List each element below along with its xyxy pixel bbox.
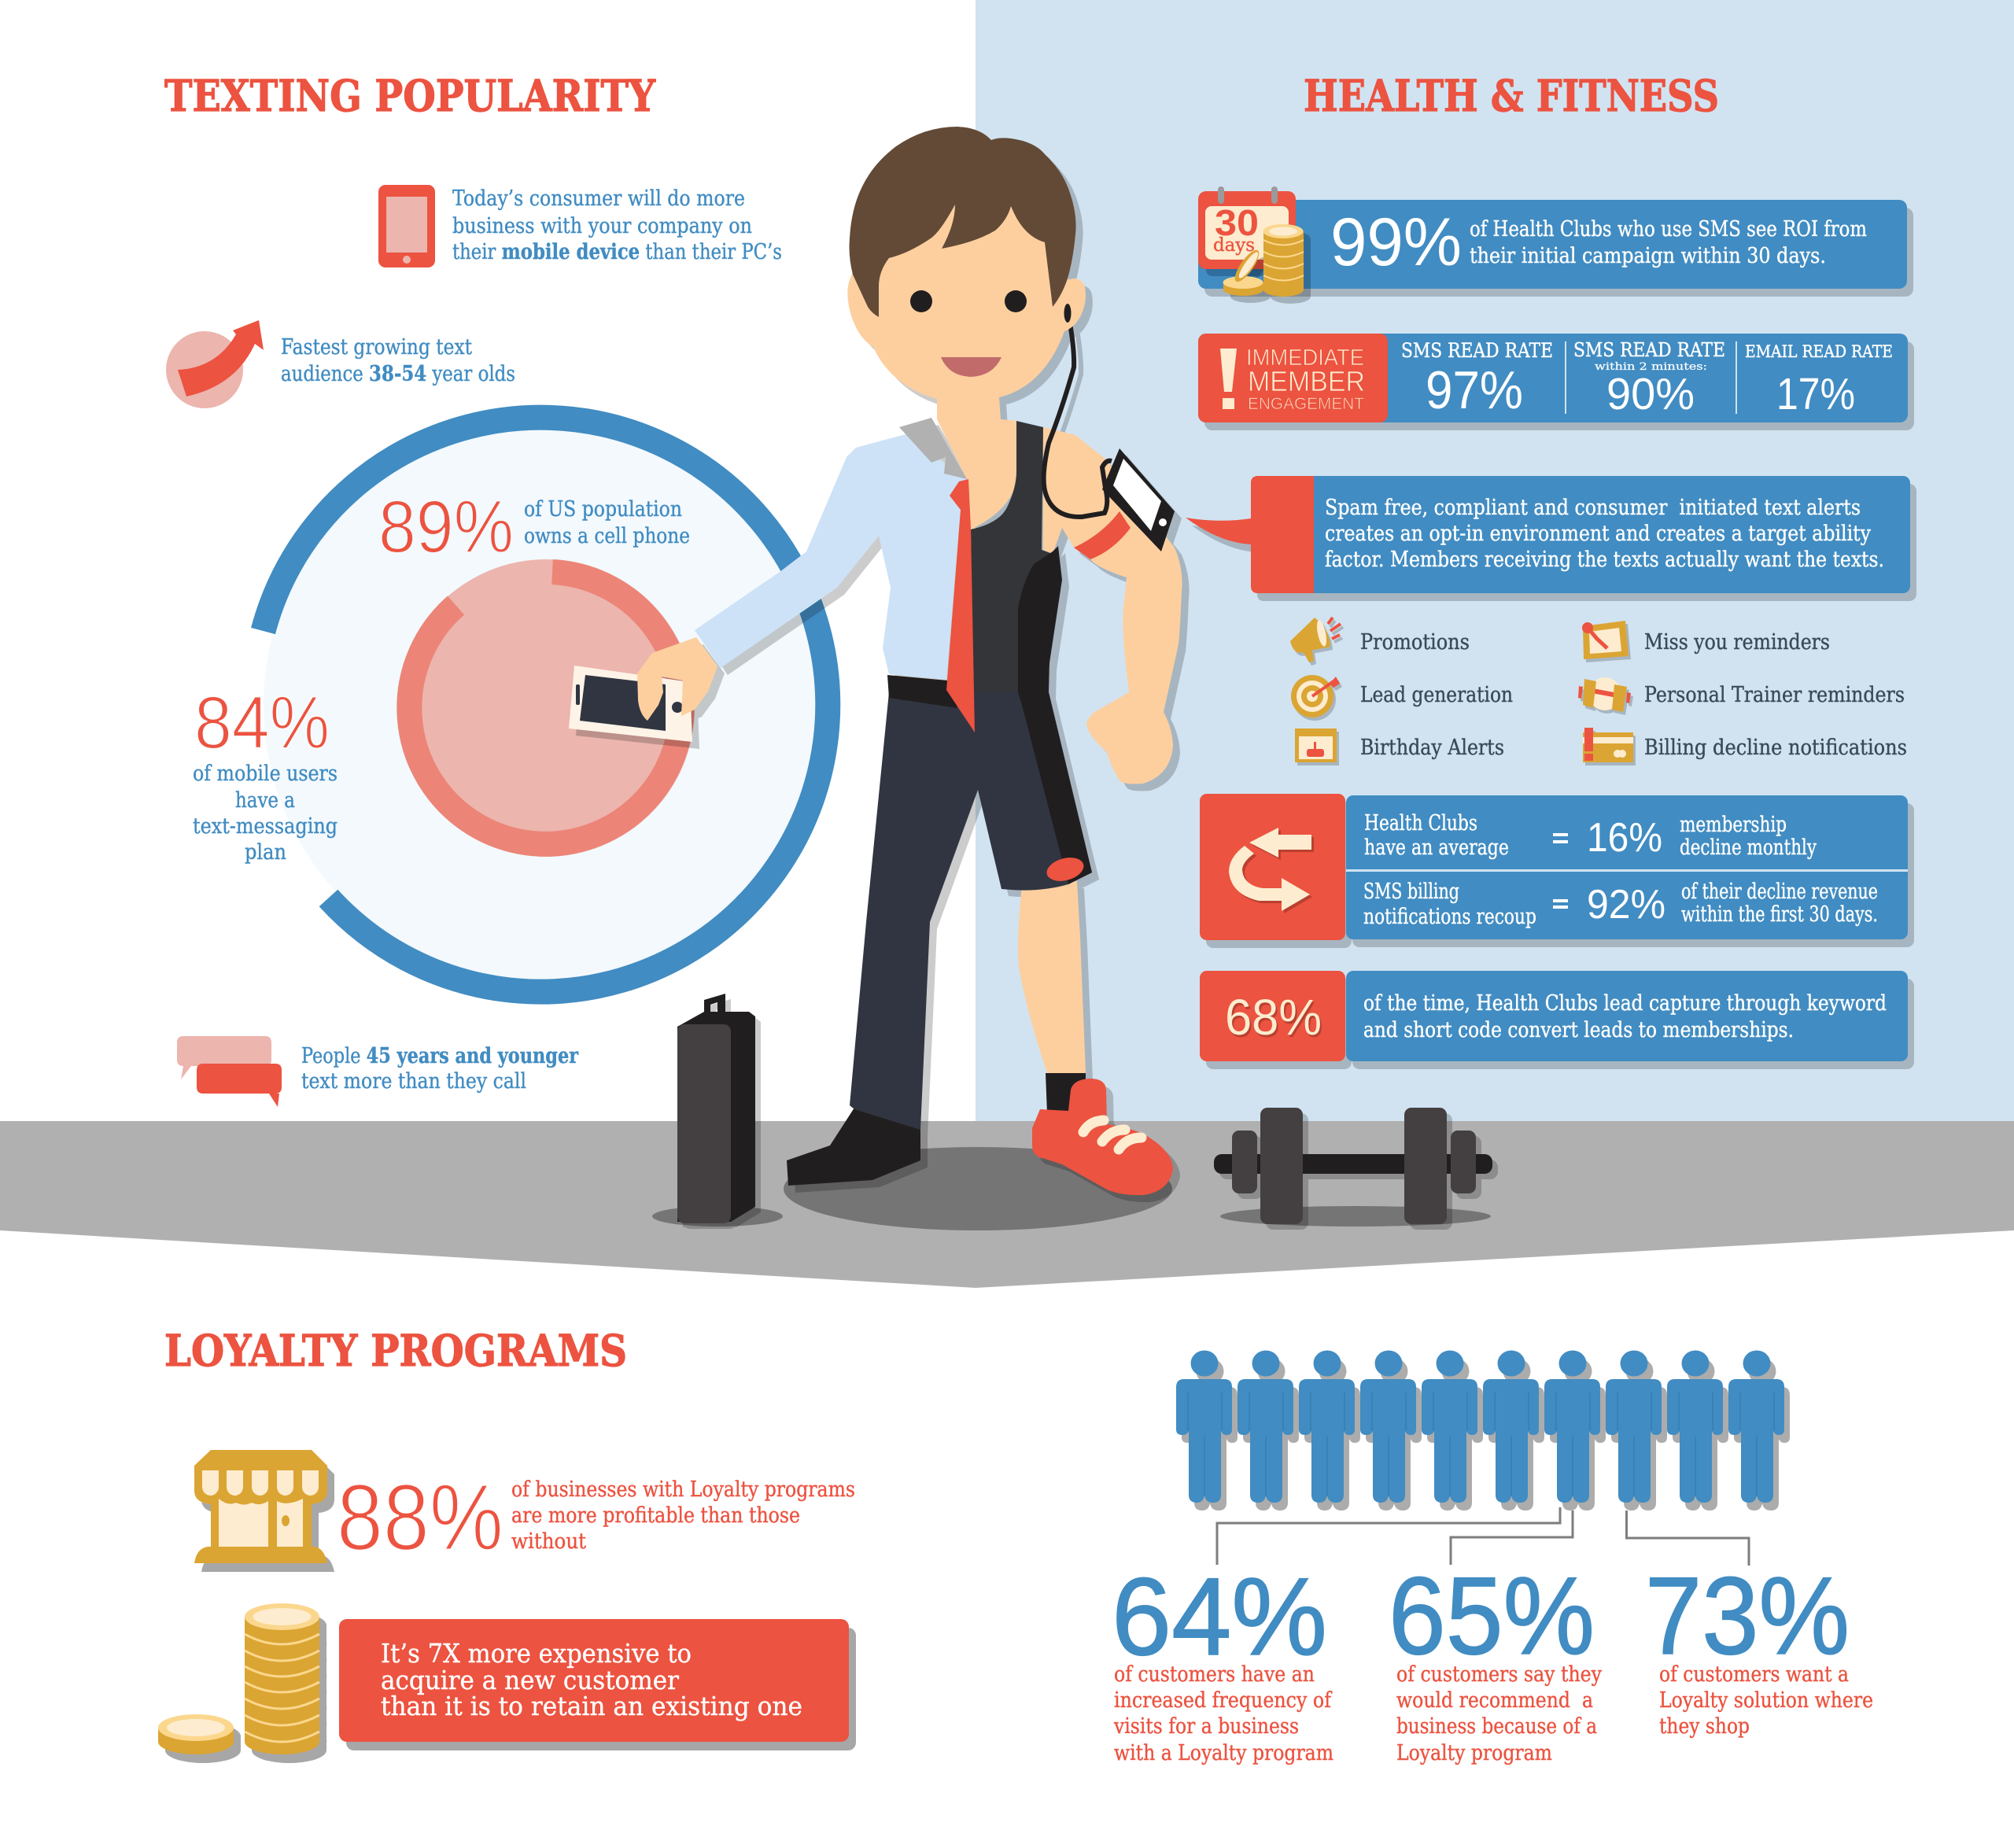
row: 92 percent: 92% xyxy=(1587,882,1665,928)
text: mobile device: Today’s consumer will do more xyxy=(452,186,745,211)
text: lead capture: and short code convert leads to memberships. xyxy=(1363,1018,1794,1042)
blue panel xyxy=(1346,795,1908,939)
row: 16 percent: membership xyxy=(1680,813,1787,837)
left hand xyxy=(637,637,717,721)
head xyxy=(847,127,1086,419)
label block: IMMEDIATE xyxy=(1246,345,1364,371)
text: mobile users: plan xyxy=(245,840,286,865)
trousers xyxy=(850,692,1092,1130)
icon: megaphone xyxy=(1290,618,1341,662)
text: loyalty profitable xyxy=(511,1477,855,1554)
text: loyalty profitable: of businesses with Loyalty programs xyxy=(511,1477,855,1502)
text: loyalty profitable: without xyxy=(511,1529,586,1554)
text: ROI: of Health Clubs who use SMS see ROI from xyxy=(1470,217,1867,242)
stat: 64 percent: increased frequency of xyxy=(1114,1688,1333,1713)
chart: 84 percent ring xyxy=(263,418,828,992)
blue box xyxy=(1346,971,1908,1061)
panel: spam free callout xyxy=(1186,476,1910,593)
text: fastest growing: Fastest growing text xyxy=(281,335,472,360)
text: ROI xyxy=(1470,217,1867,268)
icon: target xyxy=(1291,675,1340,717)
text: birthday alerts: Birthday Alerts xyxy=(1360,736,1504,760)
stat: SMS read rate within 2 minutes: SMS READ RATE xyxy=(1573,339,1725,361)
text: lead generation: Lead generation xyxy=(1360,683,1513,707)
panel background xyxy=(339,1619,849,1742)
panel: 68 percent xyxy=(1200,971,1908,1061)
floor shadows xyxy=(652,1147,1491,1230)
stat: SMS read rate: 97% xyxy=(1426,360,1523,420)
shirt with left sleeve xyxy=(695,434,967,680)
sock xyxy=(1046,1073,1086,1113)
icon list xyxy=(1290,618,1907,762)
chart: inner pie xyxy=(397,559,695,857)
panel background xyxy=(1198,334,1908,422)
icon: calendar with coins: days xyxy=(1213,235,1255,256)
text: miss you reminders: Miss you reminders xyxy=(1644,630,1830,655)
stat: email read rate: EMAIL READ RATE xyxy=(1745,342,1893,361)
stat: email read rate xyxy=(1745,342,1893,419)
stat: 65 percent xyxy=(1389,1554,1603,1765)
icon: tablet xyxy=(378,185,435,267)
text: lead capture: of the time, Health Clubs lead capture through keyword xyxy=(1363,991,1887,1016)
number: 84%: 84% xyxy=(194,681,330,765)
text: loyalty profitable: are more profitable than those xyxy=(511,1503,800,1528)
text: spam free xyxy=(1325,496,1884,572)
red box xyxy=(1200,971,1345,1061)
stat: 65 percent: Loyalty program xyxy=(1396,1741,1552,1765)
row: 16 percent: decline monthly xyxy=(1680,835,1817,860)
stat: SMS read rate within 2 minutes: 90% xyxy=(1606,369,1695,419)
stat: 65 percent: 65% xyxy=(1389,1554,1595,1677)
icon: calendar with coins xyxy=(1198,186,1304,297)
text: mobile users: text-messaging xyxy=(193,814,338,839)
number: 68%: 68% xyxy=(1225,989,1322,1046)
shoe: black xyxy=(787,1108,920,1186)
text: mobile device xyxy=(452,186,782,264)
tablet stat xyxy=(378,185,782,267)
briefcase xyxy=(677,994,755,1223)
stat: 64 percent: visits for a business xyxy=(1113,1714,1299,1739)
connector lines xyxy=(1217,1507,1749,1566)
speech stat xyxy=(177,1036,579,1107)
row: 16 percent xyxy=(1364,811,1817,861)
panel: 99 percent ROI xyxy=(1198,186,1907,297)
leg xyxy=(1018,881,1086,1073)
chart: outer circle fill xyxy=(264,427,819,983)
stat: SMS read rate within 2 minutes xyxy=(1573,339,1725,419)
text: promotions: Promotions xyxy=(1360,630,1470,655)
stat: 65 percent: business because of a xyxy=(1396,1714,1597,1739)
icon: coins xyxy=(158,1603,319,1754)
chart: 89 percent ring xyxy=(409,572,681,844)
floor xyxy=(0,1121,2014,1288)
text: 7X: acquire a new customer xyxy=(381,1665,679,1695)
panel: 7X more expensive xyxy=(339,1619,849,1742)
text: billing decline: Billing decline notifications xyxy=(1644,736,1907,760)
icon: dumbbell xyxy=(1578,677,1631,712)
text: 7X: It’s 7X more expensive to xyxy=(381,1638,692,1669)
text: people 45 years xyxy=(301,1044,579,1094)
text: ROI: their initial campaign within 30 days. xyxy=(1470,244,1826,268)
stat: email read rate: 17% xyxy=(1776,369,1855,419)
text: US population: of US population xyxy=(524,497,682,522)
text: US population: owns a cell phone xyxy=(524,524,690,548)
icon: pinned note xyxy=(1582,621,1629,659)
people row xyxy=(1176,1350,1784,1503)
text: US population xyxy=(524,497,690,548)
text: lead capture xyxy=(1363,991,1887,1042)
stat: 73 percent: of customers want a xyxy=(1659,1662,1849,1687)
text: mobile users: of mobile users xyxy=(193,762,338,786)
stat: 64 percent xyxy=(1112,1555,1333,1765)
text: mobile users: have a xyxy=(235,788,295,813)
icon: return arrows xyxy=(1229,828,1311,911)
row: 92 percent: notifications recoup xyxy=(1363,905,1536,929)
text: fastest growing xyxy=(281,335,515,386)
dumbbell xyxy=(1214,1108,1492,1224)
row: 92 percent: within the first 30 days. xyxy=(1681,902,1878,927)
text: spam free: Spam free, compliant and consumer initiated text alerts xyxy=(1325,496,1861,520)
row: 92 percent: of their decline revenue xyxy=(1681,880,1878,904)
stat: 73 percent: 73% xyxy=(1645,1554,1850,1677)
earphone wire xyxy=(1044,311,1112,517)
text: mobile users xyxy=(193,762,338,865)
text: 7X: than it is to retain an existing one xyxy=(381,1691,802,1721)
stat: SMS read rate within 2 minutes: within 2 minutes: xyxy=(1595,361,1707,373)
panel: membership decline xyxy=(1200,794,1908,940)
panel: immediate member engagement xyxy=(1198,334,1908,422)
stat: 73 percent: Loyalty solution where xyxy=(1659,1688,1873,1713)
text: mobile device: their mobile device than their PC’s xyxy=(452,240,782,264)
armband xyxy=(1074,511,1131,559)
text: mobile device: business with your company on xyxy=(452,214,752,238)
heading: loyalty programs: LOYALTY PROGRAMS xyxy=(164,1325,627,1376)
stat: 73 percent: they shop xyxy=(1659,1714,1750,1739)
icon: storefront xyxy=(194,1450,327,1563)
red icon box xyxy=(1200,794,1345,940)
text: 7X xyxy=(381,1638,802,1721)
heading: health and fitness: HEALTH & FITNESS xyxy=(1304,70,1719,121)
text: spam free: factor. Members receiving the texts actually want the texts. xyxy=(1325,548,1884,572)
character xyxy=(569,127,1182,1195)
label block: ENGAGEMENT xyxy=(1248,395,1364,413)
label block xyxy=(1198,334,1388,422)
text: personal trainer reminders: Personal Trainer reminders xyxy=(1644,683,1905,707)
stat: 64 percent: of customers have an xyxy=(1114,1662,1315,1687)
collar xyxy=(899,418,967,479)
heading: texting popularity: TEXTING POPULARITY xyxy=(164,70,656,121)
circular chart xyxy=(193,418,828,992)
stat: 65 percent: of customers say they xyxy=(1396,1662,1603,1687)
chest xyxy=(937,419,1018,529)
row: 16 percent: have an average xyxy=(1364,835,1509,860)
label block: MEMBER xyxy=(1248,365,1365,397)
number: 99%: 99% xyxy=(1330,205,1462,280)
stat: 64 percent: with a Loyalty program xyxy=(1114,1741,1333,1765)
icon: calendar with coins: 30 xyxy=(1215,202,1259,243)
stat: SMS read rate xyxy=(1401,339,1553,420)
shoe: red xyxy=(1032,1079,1173,1195)
tank top xyxy=(971,421,1062,692)
icon: birthday calendar xyxy=(1295,729,1337,762)
armband phone xyxy=(1102,448,1175,551)
fastest growing stat xyxy=(166,320,515,408)
number: 88%: 88% xyxy=(337,1465,504,1570)
text: spam free: creates an opt-in environment and creates a target ability xyxy=(1325,522,1872,546)
text: people 45 years: People 45 years and younger xyxy=(301,1044,579,1068)
stat: 73 percent xyxy=(1645,1554,1873,1739)
right background panel xyxy=(976,0,2014,1125)
number: 89%: 89% xyxy=(378,485,514,569)
stat: 64 percent: 64% xyxy=(1112,1555,1327,1678)
right arm xyxy=(1043,427,1182,784)
row: 92 percent xyxy=(1363,880,1878,929)
stat: 65 percent: would recommend a xyxy=(1396,1688,1593,1713)
stat: SMS read rate: SMS READ RATE xyxy=(1401,339,1553,362)
row: 16 percent: 16% xyxy=(1587,815,1662,861)
icon: speech bubbles xyxy=(177,1036,282,1107)
held phone xyxy=(569,666,692,742)
panel background xyxy=(1198,200,1907,289)
icon: growth arrow xyxy=(166,320,264,408)
row: 92 percent: SMS billing xyxy=(1363,880,1459,904)
text: people 45 years: text more than they call xyxy=(301,1069,526,1094)
icon: billing card xyxy=(1583,728,1633,762)
callout box xyxy=(1186,476,1910,593)
text: fastest growing: audience 38-54 year olds xyxy=(281,362,515,386)
tie xyxy=(946,479,975,732)
row: 16 percent: Health Clubs xyxy=(1364,811,1477,835)
belt xyxy=(887,675,957,708)
